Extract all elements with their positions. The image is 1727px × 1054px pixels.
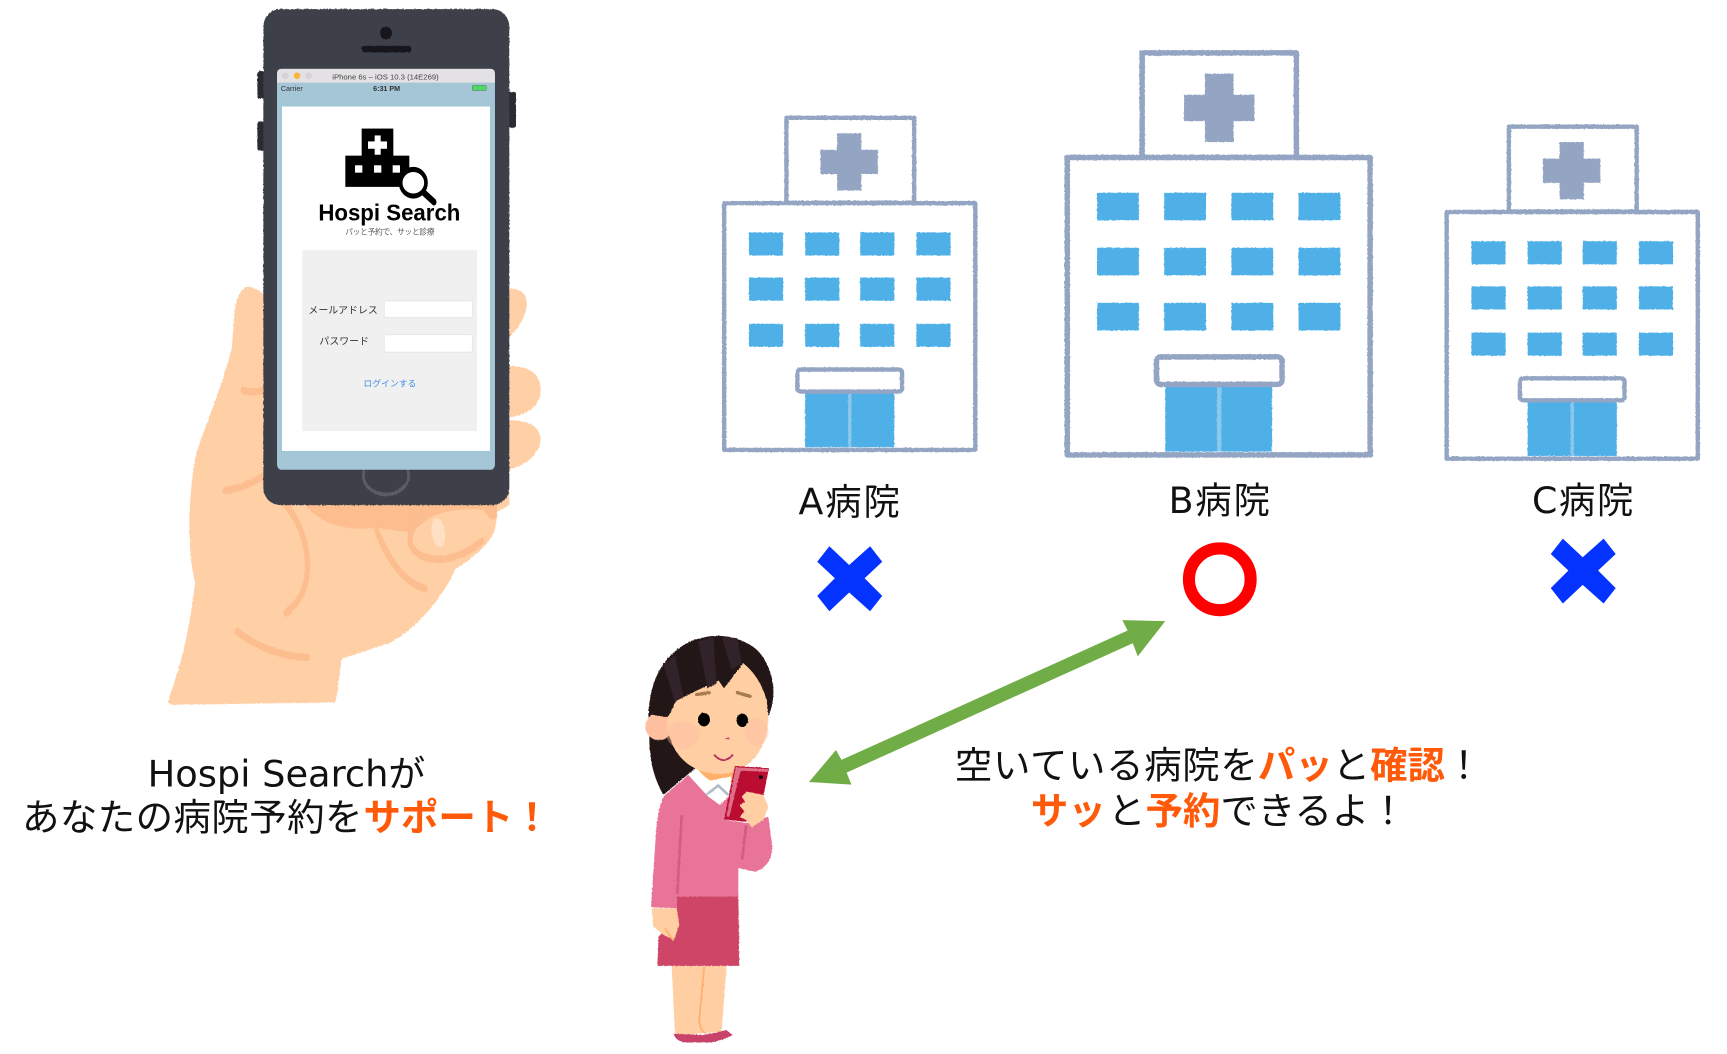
caption: check and reserve: と (1333, 744, 1370, 788)
label: A病院: A病院 (799, 480, 900, 523)
left hand (652, 908, 679, 941)
caption: check and reserve: 空いている病院を (955, 744, 1258, 788)
caption: Hospi Search support: あなたの病院予約を (22, 795, 362, 839)
neck and collar (688, 770, 735, 805)
screen text: 6:31 PM (373, 85, 400, 93)
phone body (257, 9, 516, 505)
caption: check and reserve: できるよ！ (1220, 789, 1407, 833)
phone (724, 766, 769, 822)
caption: check and reserve: 確認 (1370, 744, 1445, 788)
caption: Hospi Search support: Hospi Searchが (148, 752, 425, 795)
caption: check and reserve: と (1108, 789, 1145, 833)
label: C病院: C病院 (1532, 479, 1633, 522)
screen text (281, 72, 460, 390)
hair back (649, 636, 773, 795)
caption: Hospi Search support (22, 752, 551, 839)
screen text: メールアドレス (308, 305, 378, 316)
screen text: パスワード (319, 336, 369, 348)
mark: A cross (817, 546, 882, 611)
screen text: Carrier (281, 85, 303, 93)
right hand (739, 792, 768, 827)
screen text: iPhone 6s – iOS 10.3 (14E269) (332, 72, 439, 81)
mark: B circle (1189, 548, 1251, 610)
shoes (674, 1030, 733, 1043)
app logo: hospital with magnifier (345, 129, 434, 202)
label: B病院: B病院 (1169, 479, 1270, 522)
caption: check and reserve: ！ (1445, 744, 1482, 788)
caption: check and reserve: 予約 (1145, 789, 1220, 833)
skirt (657, 895, 739, 966)
hospital A (724, 118, 975, 450)
screen text: Hospi Search (318, 199, 460, 225)
screen text: ログインする (363, 378, 416, 390)
hospital C (1447, 127, 1698, 459)
legs (672, 965, 727, 1036)
arrow: double-headed between user and hospital B (809, 620, 1165, 785)
head (645, 636, 772, 774)
phone screen (277, 69, 495, 470)
hospital B (1067, 53, 1370, 455)
caption: check and reserve (955, 744, 1482, 833)
caption: Hospi Search support: サポート！ (363, 795, 551, 839)
illustration: hand holding phone (168, 9, 541, 705)
caption: check and reserve: サッ (1031, 789, 1106, 833)
mark: C cross (1551, 539, 1616, 604)
caption: check and reserve: パッ (1258, 744, 1333, 788)
sweater (651, 775, 772, 908)
screen text: パッと予約で、サッと診療 (345, 227, 435, 237)
illustration: woman with smartphone (645, 636, 773, 1043)
hand palm and fingers (168, 287, 541, 705)
